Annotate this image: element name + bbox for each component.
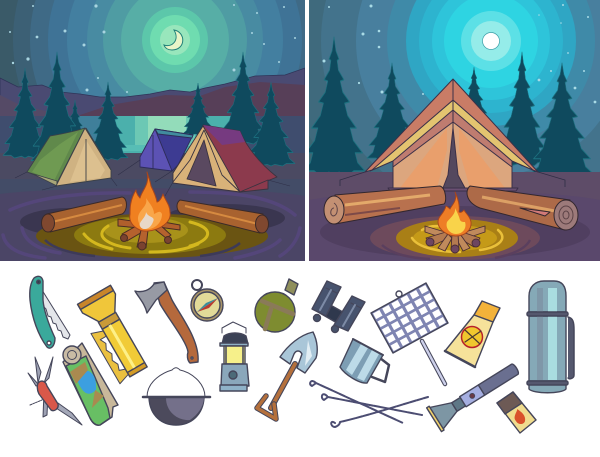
campfire bbox=[118, 172, 180, 250]
icon: crescent moon bbox=[164, 30, 183, 50]
left big log bbox=[324, 186, 446, 224]
right log bbox=[177, 200, 268, 233]
ground bbox=[0, 153, 305, 261]
guy ropes and pegs bbox=[340, 172, 565, 187]
icon: barbecue grill grate bbox=[371, 283, 448, 384]
lake with moon reflection bbox=[0, 116, 305, 153]
icon: torch flashlight bbox=[427, 356, 524, 432]
trees bbox=[3, 52, 295, 166]
campfire bbox=[425, 192, 485, 253]
icon: rolled map bbox=[63, 343, 118, 425]
firelight on ground bbox=[382, 219, 530, 259]
guy ropes bbox=[15, 160, 290, 196]
tent: red bbox=[173, 125, 277, 192]
icon: full moon bbox=[482, 32, 500, 50]
icon: binoculars bbox=[312, 281, 365, 332]
icon: skewers bbox=[310, 381, 428, 427]
tent: purple bbox=[140, 129, 193, 171]
icon: matchbox bbox=[497, 392, 536, 433]
panel: large tent at night bbox=[286, 0, 600, 261]
icon: thermos bbox=[527, 281, 574, 393]
icon: metal mug bbox=[340, 339, 389, 383]
right big log bbox=[467, 186, 578, 230]
moonlit sky rings bbox=[309, 0, 600, 172]
stars bbox=[322, 4, 596, 104]
moonlit sky rings bbox=[0, 0, 305, 97]
tent: green bbox=[27, 128, 111, 186]
ground bbox=[309, 172, 600, 261]
stars bbox=[9, 4, 296, 93]
icon: lantern bbox=[220, 322, 249, 391]
icon: shovel bbox=[257, 332, 317, 419]
tent: large orange bbox=[365, 79, 538, 191]
left log bbox=[42, 197, 126, 232]
icon: canteen bbox=[255, 279, 298, 332]
icon: axe bbox=[135, 282, 198, 363]
equipment icons bbox=[28, 276, 574, 433]
panel: campsite with three tents at night bbox=[0, 0, 305, 261]
icon: compass bbox=[191, 280, 223, 321]
icon: yellow flashlight with saw bbox=[75, 285, 155, 384]
trees bbox=[303, 37, 593, 177]
icon: insect repellent tube bbox=[445, 301, 500, 367]
icon: pocket knife bbox=[28, 357, 82, 425]
mountains bbox=[0, 68, 305, 120]
firelight on ground bbox=[36, 214, 268, 258]
icon: cooking pot bbox=[143, 368, 210, 425]
icon: folding saw bbox=[30, 276, 70, 348]
